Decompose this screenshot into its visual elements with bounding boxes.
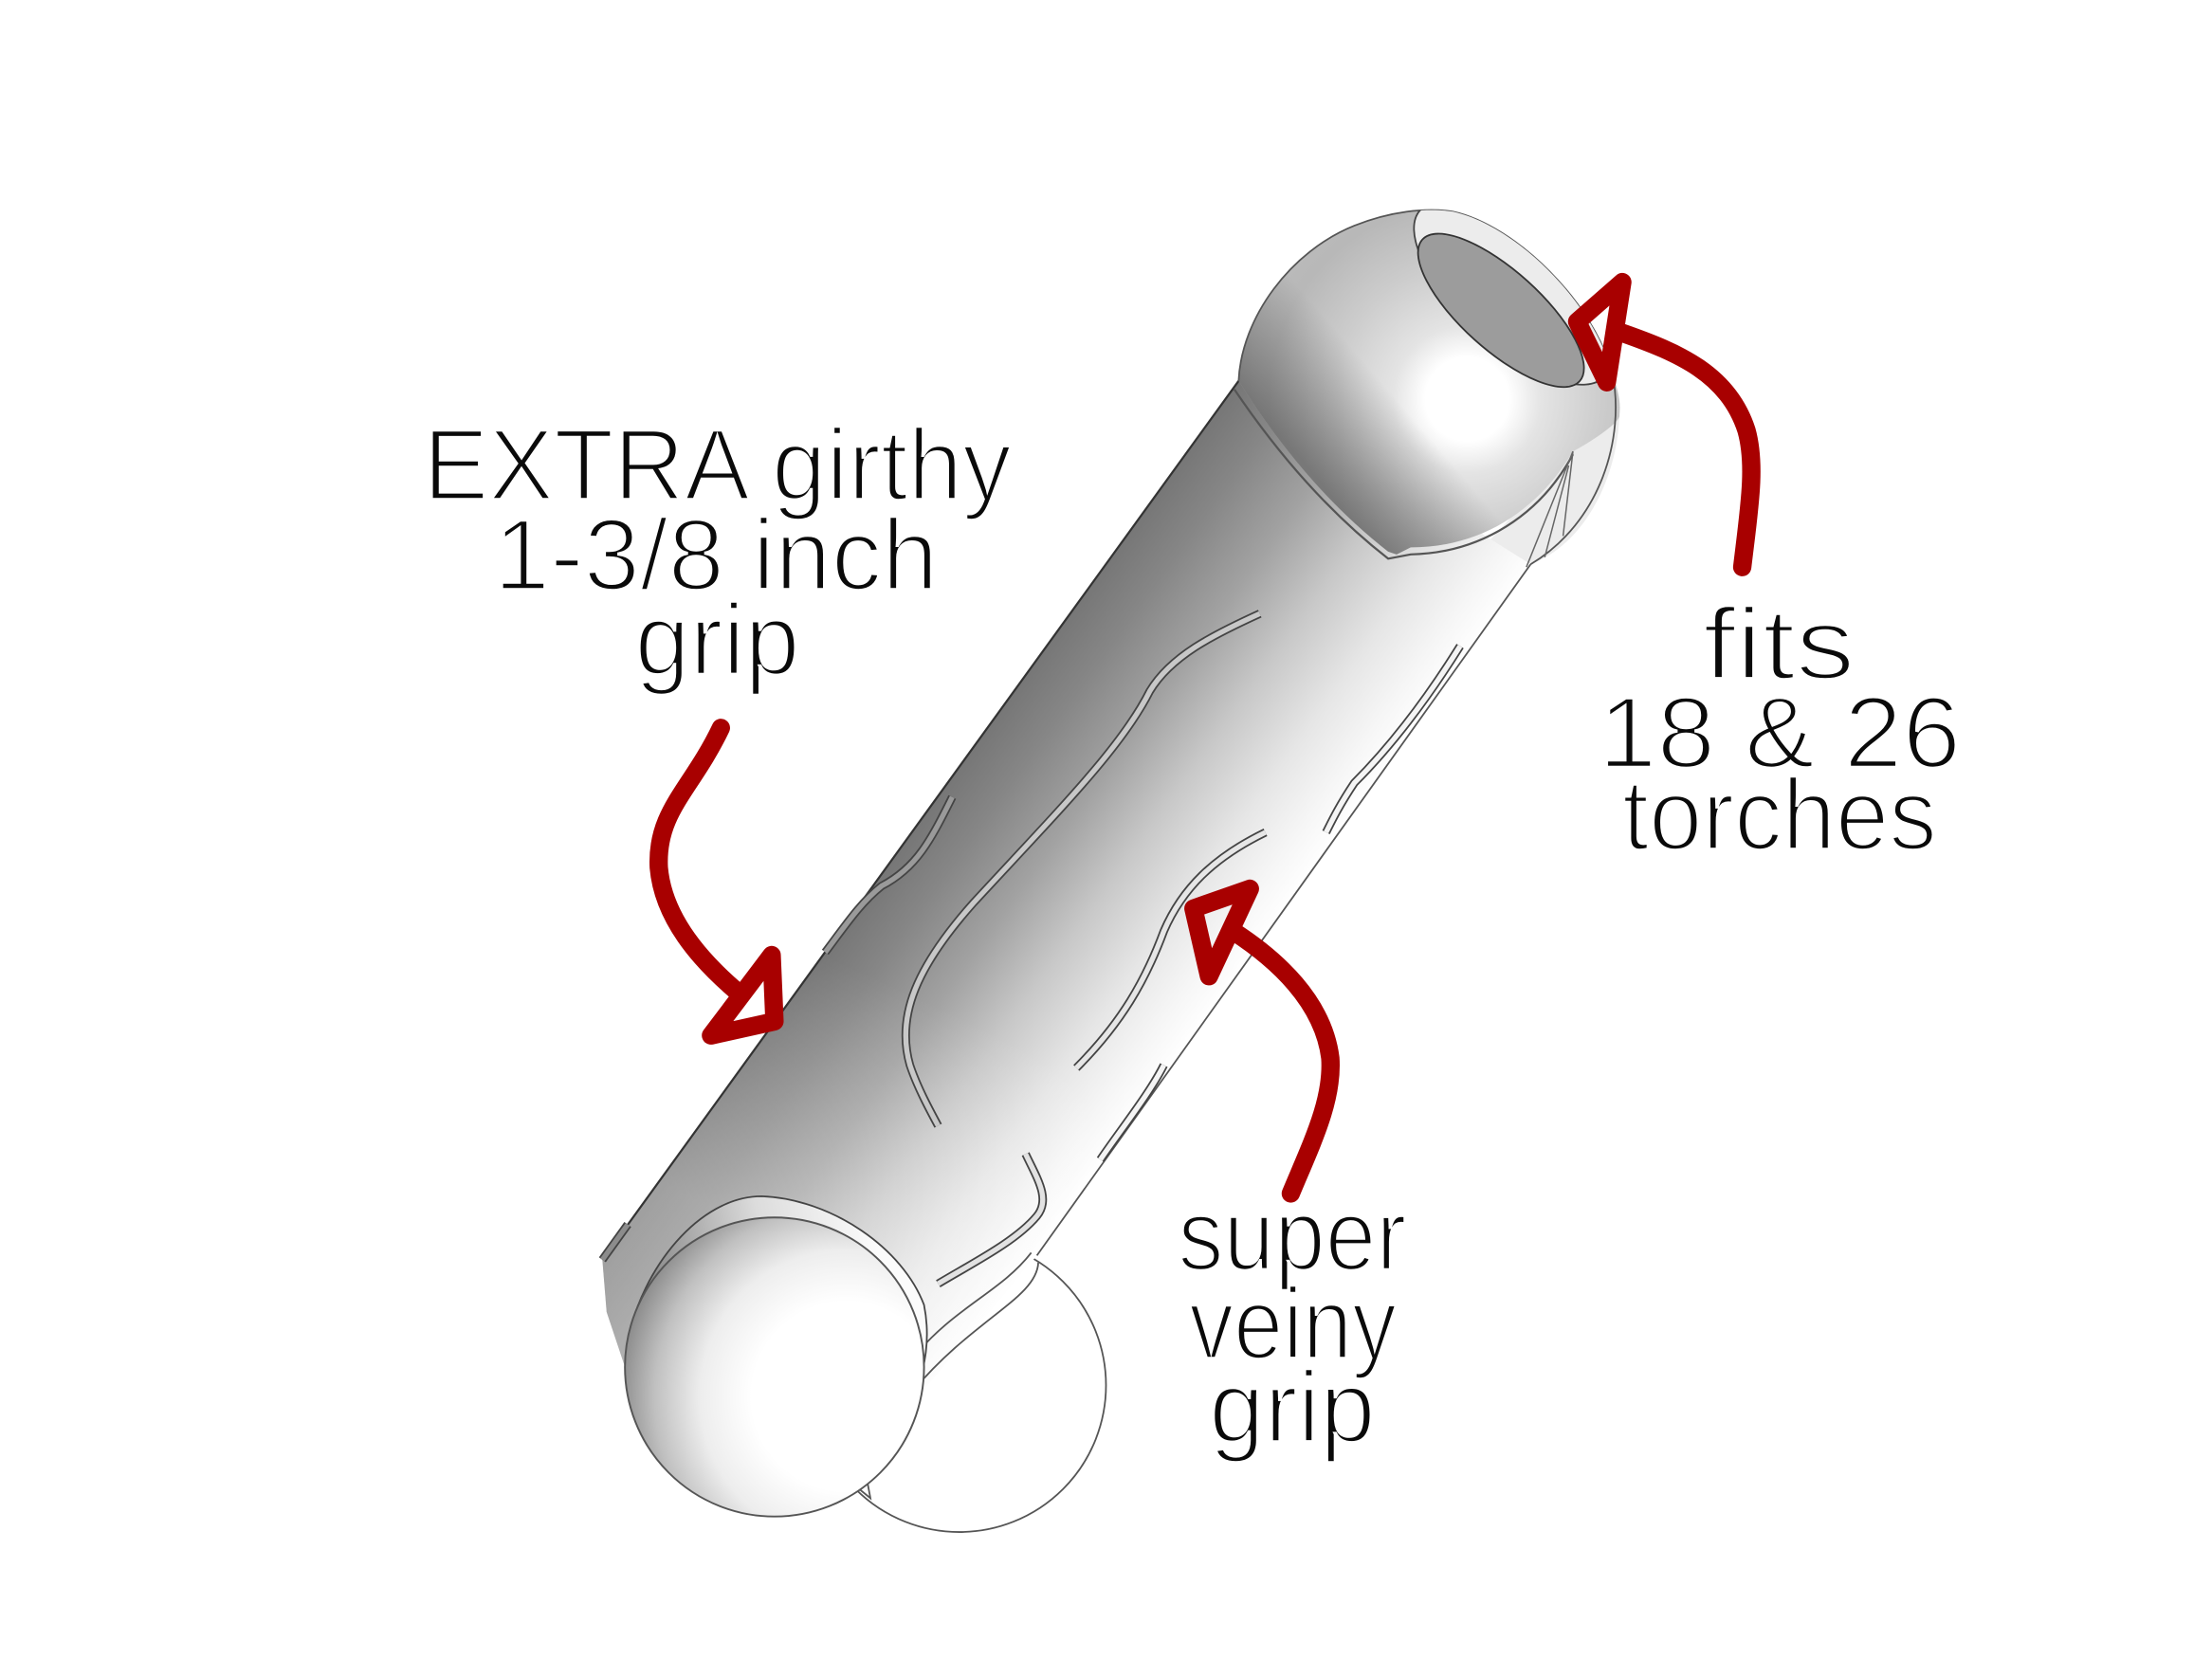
arrow: veiny grip bbox=[1194, 889, 1330, 1194]
annotated torch grip illustration bbox=[432, 209, 1955, 1533]
label: girth: grip bbox=[635, 582, 800, 696]
tube lower fade bbox=[602, 381, 1530, 1390]
head cap bbox=[1238, 210, 1619, 555]
head ribs bbox=[1526, 451, 1573, 567]
tube edge lines bbox=[602, 381, 1530, 1260]
arrow: girth bbox=[659, 728, 775, 1035]
label: torch fit: fits bbox=[1703, 587, 1856, 701]
vein: long centre bbox=[905, 613, 1260, 1126]
head shadow bbox=[1238, 210, 1619, 555]
head outline bbox=[1238, 210, 1616, 564]
vein: right edge lower bbox=[1101, 1066, 1164, 1159]
tube body bbox=[602, 381, 1530, 1390]
connector between base and rear ball bbox=[832, 1456, 870, 1498]
label: torch fit: torches bbox=[1622, 757, 1937, 871]
label: girth: 1-3/8 inch bbox=[494, 498, 938, 611]
arrow: torch opening bbox=[1577, 283, 1751, 567]
label: veiny grip: super bbox=[1178, 1177, 1406, 1291]
rear ball bbox=[813, 1239, 1106, 1532]
opening hole bbox=[1417, 233, 1585, 389]
label: torch fit bbox=[1599, 587, 1961, 871]
label: girth: EXTRA girthy bbox=[423, 408, 1012, 521]
label: girth bbox=[423, 408, 1012, 696]
vein: left edge bbox=[825, 797, 952, 952]
base disc bbox=[625, 1217, 924, 1517]
grip illustration bbox=[602, 173, 1638, 1532]
label: torch fit: 18 & 26 bbox=[1599, 676, 1961, 790]
label: veiny grip: grip bbox=[1209, 1350, 1376, 1464]
base collar bbox=[628, 1196, 927, 1390]
torch opening bbox=[1413, 210, 1603, 389]
bands to rear ball bbox=[914, 1252, 1038, 1390]
label: veiny grip bbox=[1178, 1177, 1406, 1464]
head rim line bbox=[1234, 390, 1573, 558]
vein: base left edge bbox=[602, 1225, 628, 1260]
head backing bbox=[1467, 410, 1619, 564]
opening rim bbox=[1413, 210, 1603, 386]
vein: bottom hook bbox=[938, 1154, 1043, 1284]
label: veiny grip: veiny bbox=[1189, 1267, 1397, 1380]
vein: short centre bbox=[1076, 832, 1266, 1067]
vein: right edge upper bbox=[1326, 647, 1460, 832]
